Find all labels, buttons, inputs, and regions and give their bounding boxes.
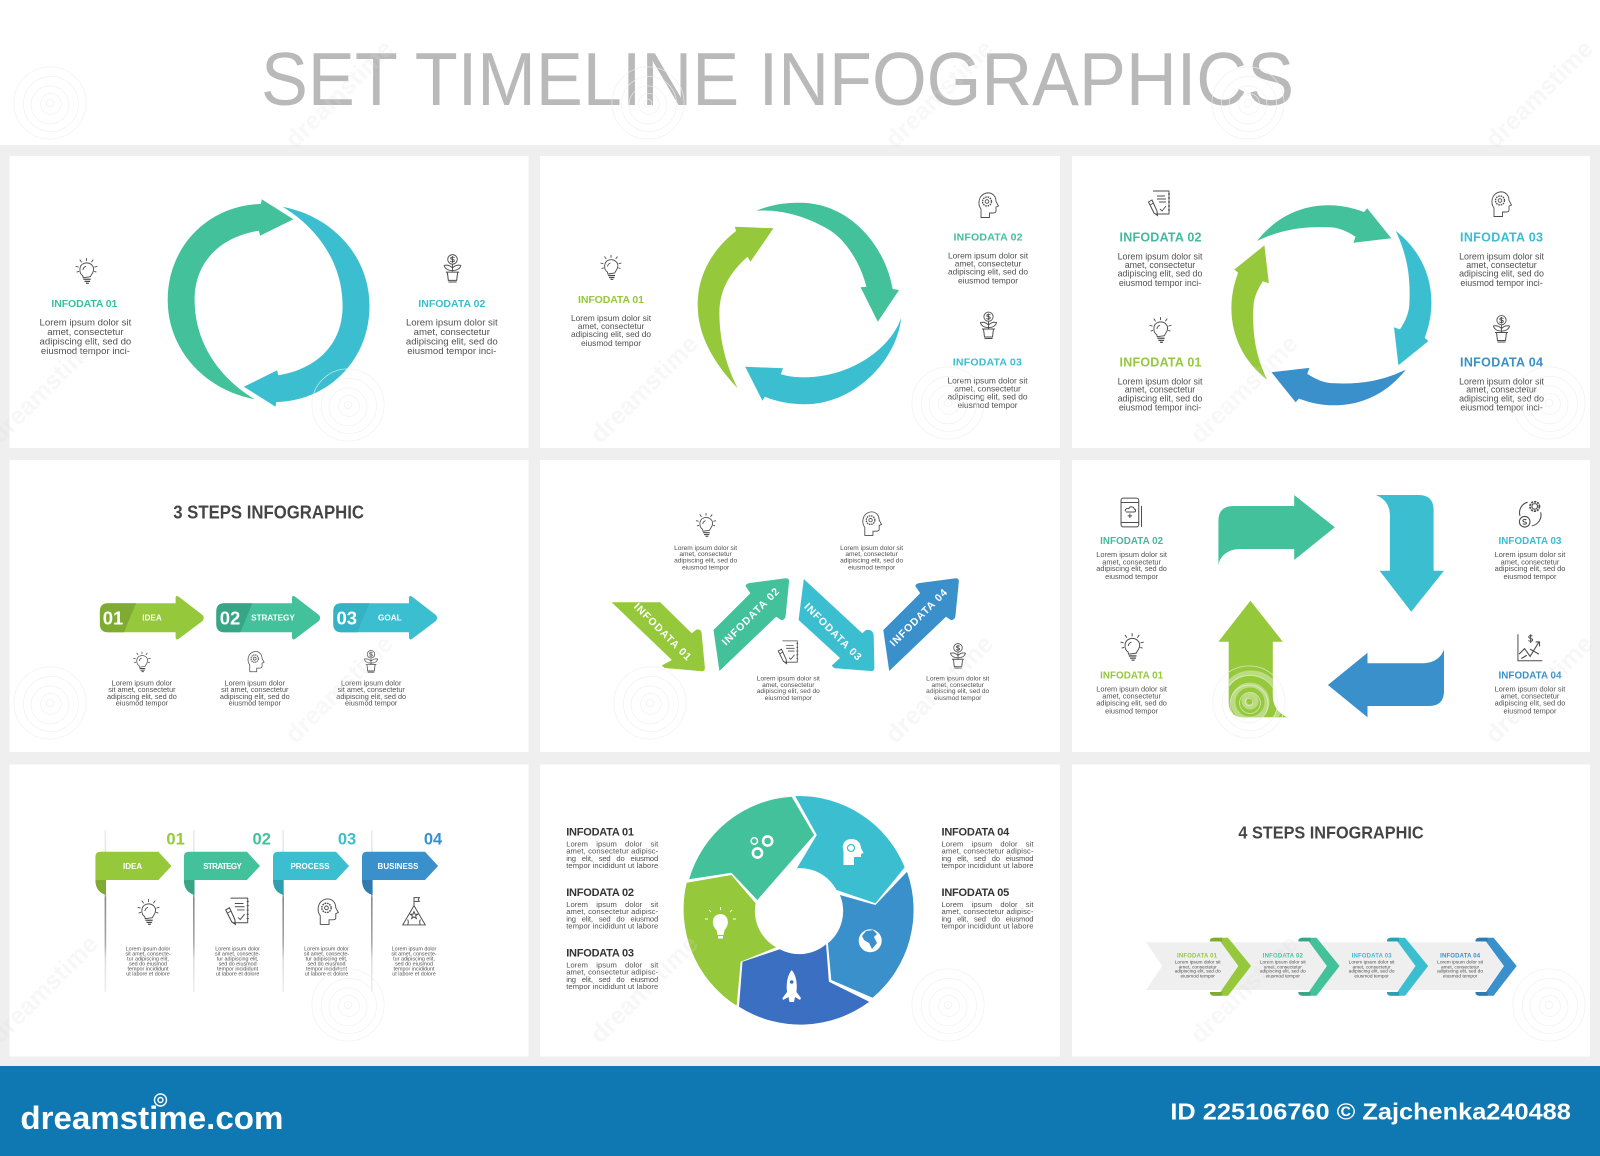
icon: head	[248, 652, 264, 672]
label: infodata 01: INFODATA 01	[566, 826, 634, 838]
icon: plant	[980, 312, 996, 338]
icon: bulb	[696, 513, 716, 536]
icon: plant	[1494, 316, 1510, 342]
flag: business: BUSINESS	[378, 862, 419, 871]
text block: Lorem ipsum dolor sit	[566, 961, 659, 970]
text block: ing elit, sed do eiusmod	[566, 914, 658, 923]
arrow: step 02	[216, 596, 320, 639]
text block: sed do eiusmod	[395, 962, 433, 968]
chevron: step 03: amet, consectetur	[1353, 964, 1391, 970]
text block: ut labore et dolore	[305, 972, 348, 978]
text block: sit amet, consecte-	[304, 952, 349, 958]
chevron: step 04: amet, consectetur	[1441, 964, 1480, 970]
text block: amet, consectetur	[954, 384, 1021, 394]
text block: Lorem ipsum dolor sit	[1096, 684, 1167, 693]
text block: eiusmod tempor	[1504, 572, 1557, 581]
text block: adipiscing elit, sed do	[1096, 564, 1167, 573]
text block: adipiscing elit, sed do	[40, 336, 131, 347]
icon: document	[1148, 191, 1170, 216]
text block: eiusmod tempor inci-	[407, 346, 496, 357]
text block: tempor incididunt ut labore	[566, 861, 658, 870]
text block: adipiscing elit, sed do	[947, 392, 1028, 402]
watermark text: dreamstime	[880, 35, 999, 154]
text block: amet, consectetur	[762, 682, 815, 689]
text block: tur adipiscing elit,	[127, 957, 169, 963]
text block: eiusmod tempor	[682, 564, 730, 571]
text block: adipiscing elit, sed do	[840, 557, 903, 564]
arrow: step 01: 01	[103, 607, 123, 628]
logo: dreamstime: dreamstime.com	[20, 1100, 283, 1136]
chevron: step 02	[1260, 938, 1340, 996]
panel: zigzag arrows	[540, 460, 1060, 752]
text block: amet, consectetur	[955, 258, 1021, 268]
panel: four arrow cycle	[1072, 156, 1590, 448]
text block: Lorem ipsum dolor sit	[942, 900, 1034, 909]
flag: process: 03	[338, 831, 356, 849]
panel: two arrow cycle	[10, 156, 528, 448]
text block: Lorem ipsum dolor sit	[757, 676, 820, 683]
label: infodata 01: INFODATA 01	[1120, 356, 1202, 370]
icon: cone	[403, 898, 425, 925]
label: infodata 03: INFODATA 03	[566, 948, 634, 960]
icon: bulb	[76, 258, 97, 283]
arrow: infodata 03	[799, 579, 874, 671]
shadow lines	[105, 830, 373, 992]
title: SET TIMELINE INFOGRAPHICS	[261, 37, 1294, 121]
text block: Lorem ipsum dolor sit	[947, 376, 1028, 386]
heading: 4 STEPS INFOGRAPHIC	[1238, 823, 1424, 843]
text block: eiusmod tempor	[1504, 706, 1557, 715]
text block: Lorem ipsum dolor sit	[566, 840, 659, 849]
icon: head	[979, 193, 998, 218]
text block: sit amet, consectetur	[108, 685, 176, 694]
text block: adipiscing elit, sed do	[107, 692, 177, 701]
text block: tempor incididunt	[217, 967, 259, 973]
segment: blue with globe	[828, 872, 914, 998]
arrow: step 01	[100, 596, 204, 639]
text block: eiusmod tempor	[345, 698, 398, 708]
text block: adipiscing elit, sed do	[926, 688, 990, 695]
text block: amet, consectetur adipisc-	[566, 968, 659, 977]
label: infodata 03: INFODATA 03	[1498, 536, 1562, 547]
chevron: step 01: eiusmod tempor	[1180, 973, 1215, 979]
icon: phone	[1121, 498, 1142, 527]
label: infodata 01: INFODATA 01	[51, 298, 118, 310]
text block: eiusmod tempor	[116, 698, 169, 708]
text block: eiusmod tempor	[765, 695, 813, 702]
text block: Lorem ipsum dolor	[341, 678, 402, 688]
text block: eiusmod tempor inci-	[1119, 403, 1201, 413]
text block: eiusmod tempor inci-	[1119, 278, 1201, 288]
arrow: teal cycle	[244, 207, 370, 407]
text block: Lorem ipsum dolor	[126, 947, 171, 953]
text block: ing elit, sed do eiusmod	[566, 854, 658, 863]
text block: eiusmod tempor	[958, 276, 1018, 286]
arrow: green	[757, 203, 899, 322]
text block: tempor incididunt ut labore	[566, 921, 658, 930]
text block: tempor incididunt	[127, 967, 169, 973]
icon: bulb	[1120, 633, 1144, 660]
icon: head	[318, 899, 338, 924]
text block: ing elit, sed do eiusmod	[566, 975, 658, 984]
text block: amet, consectetur	[1501, 691, 1560, 700]
text block: sit amet, consecte-	[215, 952, 260, 958]
heading: 3 STEPS INFOGRAPHIC	[173, 502, 364, 522]
arrow: green	[1257, 205, 1391, 243]
flag: idea: 01	[166, 831, 185, 849]
icon: plant	[951, 644, 965, 668]
ribbon	[1146, 942, 1504, 990]
label: infodata 01: INFODATA 01	[1100, 670, 1164, 682]
chevron: step 04: INFODATA 04	[1440, 954, 1481, 960]
text block: amet, consectetur	[1125, 260, 1195, 270]
chevron: step 01: INFODATA 01	[1177, 954, 1218, 960]
icon: document	[226, 898, 249, 924]
text block: tempor incididunt ut labore	[942, 921, 1034, 930]
panel: 4 steps infographic	[1072, 764, 1590, 1056]
text block: sit amet, consecte-	[125, 952, 171, 958]
label: infodata 02: INFODATA 02	[418, 298, 485, 310]
text block: Lorem ipsum dolor sit	[566, 900, 659, 909]
arrow: infodata 01	[612, 601, 705, 671]
segment: lime with bulb	[684, 875, 776, 1006]
text block: eiusmod tempor	[957, 400, 1018, 410]
icon: chart	[1518, 634, 1542, 661]
arrow: teal down	[1376, 495, 1444, 612]
label: infodata 03: INFODATA 03	[1460, 230, 1543, 244]
watermark text: dreamstime	[1480, 630, 1599, 749]
watermark text: dreamstime	[1185, 930, 1304, 1049]
icon: bulb	[600, 255, 622, 279]
text block: Lorem ipsum dolor sit	[1495, 550, 1565, 559]
text block: Lorem ipsum dolor sit	[40, 318, 132, 328]
chevron: step 02: adipiscing elit, sed do	[1260, 969, 1306, 975]
text block: amet, consectetur	[679, 551, 733, 558]
segment: deep blue with rocket	[739, 944, 869, 1025]
text block: adipiscing elit, sed do	[406, 336, 498, 347]
text block: eiusmod tempor	[229, 698, 282, 708]
icon: gear and money	[1519, 502, 1541, 527]
chevron: step 03	[1349, 938, 1428, 996]
text block: Lorem ipsum dolor	[304, 947, 349, 953]
icon: plant	[444, 255, 461, 282]
flag: idea: IDEA	[123, 862, 142, 871]
text block: adipiscing elit, sed do	[757, 688, 820, 695]
icon: plant	[364, 650, 378, 672]
flag: process	[273, 831, 356, 895]
text block: Lorem ipsum dolor sit	[1495, 684, 1565, 693]
arrow: lime	[698, 227, 774, 388]
arrow: step 03: GOAL	[378, 614, 402, 623]
watermark on lime arrow	[1229, 670, 1280, 718]
panel: flag timeline	[10, 764, 528, 1056]
text block: amet, consectetur	[1501, 557, 1560, 566]
label: infodata 04: INFODATA 04	[1498, 670, 1562, 682]
arrow: infodata 02	[714, 578, 789, 671]
arrow: step 02: 02	[220, 607, 240, 628]
text block: Lorem ipsum dolor	[392, 947, 437, 953]
arrow: step 03	[333, 596, 437, 639]
text block: Lorem ipsum dolor sit	[1118, 252, 1203, 262]
text block: adipiscing elit, sed do	[336, 692, 406, 701]
arrow: teal	[1394, 231, 1431, 365]
label: infodata 02: INFODATA 02	[1120, 230, 1202, 244]
flag: business: 04	[424, 831, 443, 849]
text block: adipiscing elit, sed do	[220, 692, 290, 701]
text block: eiusmod tempor	[848, 564, 896, 571]
icon: head	[1492, 192, 1512, 216]
flag: process: PROCESS	[290, 862, 330, 871]
text block: sed do eiusmod	[307, 962, 346, 968]
label: infodata 02: INFODATA 02	[954, 232, 1023, 244]
text block: Lorem ipsum dolor sit	[840, 545, 903, 552]
text block: adipiscing elit, sed do	[1495, 698, 1565, 707]
text block: amet, consectetur	[47, 327, 124, 338]
arrow: teal	[745, 318, 901, 404]
text block: Lorem ipsum dolor sit	[406, 318, 498, 328]
text block: sit amet, consecte-	[391, 952, 437, 958]
label: infodata 05: INFODATA 05	[942, 887, 1009, 899]
flag: idea	[95, 831, 185, 895]
page background	[0, 145, 1600, 1066]
chevron: step 02: eiusmod tempor	[1266, 973, 1300, 979]
arrow: lime up	[1218, 601, 1287, 717]
arrow: blue	[1272, 368, 1406, 405]
arrow: infodata 01: INFODATA 01	[631, 601, 693, 663]
text block: adipiscing elit, sed do	[1495, 564, 1565, 573]
watermark text: dreamstime	[1185, 330, 1304, 449]
text block: ing elit, sed do eiusmod	[942, 854, 1034, 863]
chevron: step 02: Lorem ipsum dolor sit	[1260, 960, 1306, 966]
text block: Lorem ipsum dolor	[225, 678, 286, 688]
text block: eiusmod tempor inci-	[1460, 278, 1543, 288]
text block: Lorem ipsum dolor	[112, 678, 173, 688]
text block: tempor incididunt ut labore	[942, 861, 1034, 870]
text block: Lorem ipsum dolor sit	[674, 545, 737, 552]
segment: teal with head	[795, 796, 905, 903]
text block: tempor incididunt	[393, 967, 435, 973]
chevron: step 01: Lorem ipsum dolor sit	[1175, 960, 1221, 966]
text block: amet, consectetur	[1466, 260, 1537, 270]
label: infodata 02: INFODATA 02	[566, 887, 634, 899]
text block: adipiscing elit, sed do	[1118, 393, 1202, 403]
watermark text: dreamstime	[585, 930, 704, 1049]
text block: eiusmod tempor	[581, 338, 641, 348]
chevron: step 02: INFODATA 02	[1263, 954, 1303, 960]
footer banner	[0, 1066, 1600, 1156]
panel: square arrow cycle	[1072, 460, 1590, 752]
arrow: infodata 04	[883, 578, 959, 671]
text block: ut labore et dolore	[216, 972, 259, 978]
text block: amet, consectetur adipisc-	[942, 907, 1034, 916]
text block: adipiscing elit, sed do	[1096, 698, 1167, 707]
text block: amet, consectetur	[414, 327, 491, 338]
text block: eiusmod tempor	[1105, 706, 1159, 715]
text block: Lorem ipsum dolor sit	[948, 250, 1029, 260]
text block: amet, consectetur adipisc-	[942, 847, 1034, 856]
icon: document	[778, 641, 798, 664]
text block: Lorem ipsum dolor sit	[1096, 550, 1167, 559]
text block: amet, consectetur	[1125, 385, 1195, 395]
panel: 3 steps infographic	[10, 460, 528, 752]
text block: Lorem ipsum dolor	[215, 947, 260, 953]
text block: sed do eiusmod	[129, 962, 167, 968]
icon: bulb	[138, 899, 159, 924]
text block: eiusmod tempor	[934, 695, 982, 702]
text block: amet, consectetur	[1102, 691, 1162, 700]
watermark text: dreamstime	[280, 630, 399, 749]
flag: strategy	[184, 831, 271, 895]
panel: five segment donut	[540, 764, 1060, 1056]
icon: bulb	[1150, 317, 1171, 342]
text block: adipiscing elit, sed do	[1459, 393, 1544, 403]
text block: amet, consectetur	[578, 321, 644, 331]
text block: adipiscing elit, sed do	[1118, 268, 1202, 278]
arrow: green cycle	[168, 199, 293, 399]
text block: adipiscing elit, sed do	[571, 329, 651, 339]
text block: Lorem ipsum dolor sit	[1118, 376, 1203, 386]
arrow: step 03: 03	[337, 607, 357, 628]
text block: eiusmod tempor	[1105, 572, 1159, 581]
watermark text: dreamstime	[1480, 35, 1599, 154]
text block: Lorem ipsum dolor sit	[1459, 376, 1544, 386]
chevron: step 04: eiusmod tempor	[1443, 973, 1478, 979]
text block: sit amet, consectetur	[221, 685, 289, 694]
text block: ing elit, sed do eiusmod	[942, 914, 1034, 923]
text block: eiusmod tempor inci-	[41, 346, 130, 357]
text block: tempor incididunt	[306, 967, 348, 973]
text block: ut labore et dolore	[126, 972, 170, 978]
watermark text: dreamstime	[880, 630, 999, 749]
chevron: step 03: adipiscing elit, sed do	[1349, 969, 1395, 975]
text block: amet, consectetur	[845, 551, 899, 558]
text block: tempor incididunt ut labore	[566, 982, 658, 991]
text block: amet, consectetur adipisc-	[566, 847, 659, 856]
text block: Lorem ipsum dolor sit	[571, 313, 652, 323]
arrow: step 01: IDEA	[142, 614, 162, 623]
arrow: step 02: STRATEGY	[251, 614, 295, 623]
chevron: step 01: adipiscing elit, sed do	[1175, 969, 1221, 975]
label: infodata 02: INFODATA 02	[1100, 536, 1164, 547]
watermark text: dreamstime	[585, 330, 704, 449]
text block: sit amet, consectetur	[338, 685, 405, 694]
chevron: step 02: amet, consectetur	[1264, 964, 1302, 970]
text block: adipiscing elit, sed do	[674, 557, 737, 564]
chevron: step 03: Lorem ipsum dolor sit	[1349, 960, 1395, 966]
text block: Lorem ipsum dolor sit	[1459, 252, 1544, 262]
text block: adipiscing elit, sed do	[948, 266, 1028, 276]
panel: three arrow cycle	[540, 156, 1060, 448]
icon: bulb	[133, 652, 151, 672]
text block: adipiscing elit, sed do	[1459, 268, 1544, 278]
label: infodata 03: INFODATA 03	[953, 356, 1022, 368]
label: infodata 04: INFODATA 04	[1460, 356, 1543, 370]
flag: business	[362, 831, 443, 895]
arrow: infodata 02: INFODATA 02	[720, 586, 782, 648]
arrow: blue left	[1328, 649, 1444, 717]
text block: amet, consectetur	[1102, 557, 1162, 566]
label: infodata 01: INFODATA 01	[578, 294, 644, 306]
text block: tur adipiscing elit,	[217, 957, 259, 963]
arrow: lime	[1231, 245, 1269, 380]
text block: eiusmod tempor inci-	[1460, 403, 1543, 413]
icon: head	[863, 512, 882, 535]
watermark text: dreamstime	[280, 35, 399, 154]
chevron: step 04: Lorem ipsum dolor sit	[1437, 960, 1484, 966]
segment: green with gears	[689, 797, 814, 900]
chevron: step 04: adipiscing elit, sed do	[1437, 969, 1483, 975]
chevron: step 03: INFODATA 03	[1352, 954, 1392, 960]
text block: sed do eiusmod	[219, 962, 257, 968]
chevron: step 04	[1437, 938, 1517, 996]
text block: amet, consectetur	[931, 682, 985, 689]
text block: amet, consectetur adipisc-	[566, 907, 659, 916]
text block: ut labore et dolore	[392, 972, 436, 978]
chevron: step 03: eiusmod tempor	[1354, 973, 1389, 979]
label: infodata 04: INFODATA 04	[942, 826, 1010, 838]
chevron: step 01: amet, consectetur	[1179, 964, 1217, 970]
text block: tur adipiscing elit,	[306, 957, 348, 963]
text block: Lorem ipsum dolor sit	[926, 676, 989, 683]
chevron: step 01	[1175, 938, 1251, 996]
text block: Lorem ipsum dolor sit	[942, 840, 1034, 849]
flag: strategy: 02	[253, 831, 271, 849]
arrow: green right	[1218, 495, 1335, 565]
image id credit: ID 225106760 © Zajchenka240488	[1170, 1098, 1571, 1124]
text block: amet, consectetur	[1466, 385, 1537, 395]
text block: tur adipiscing elit,	[393, 957, 435, 963]
arrow: infodata 04: INFODATA 04	[888, 587, 950, 649]
flag: strategy: STRATEGY	[203, 862, 242, 871]
arrow: infodata 03: INFODATA 03	[802, 601, 864, 663]
